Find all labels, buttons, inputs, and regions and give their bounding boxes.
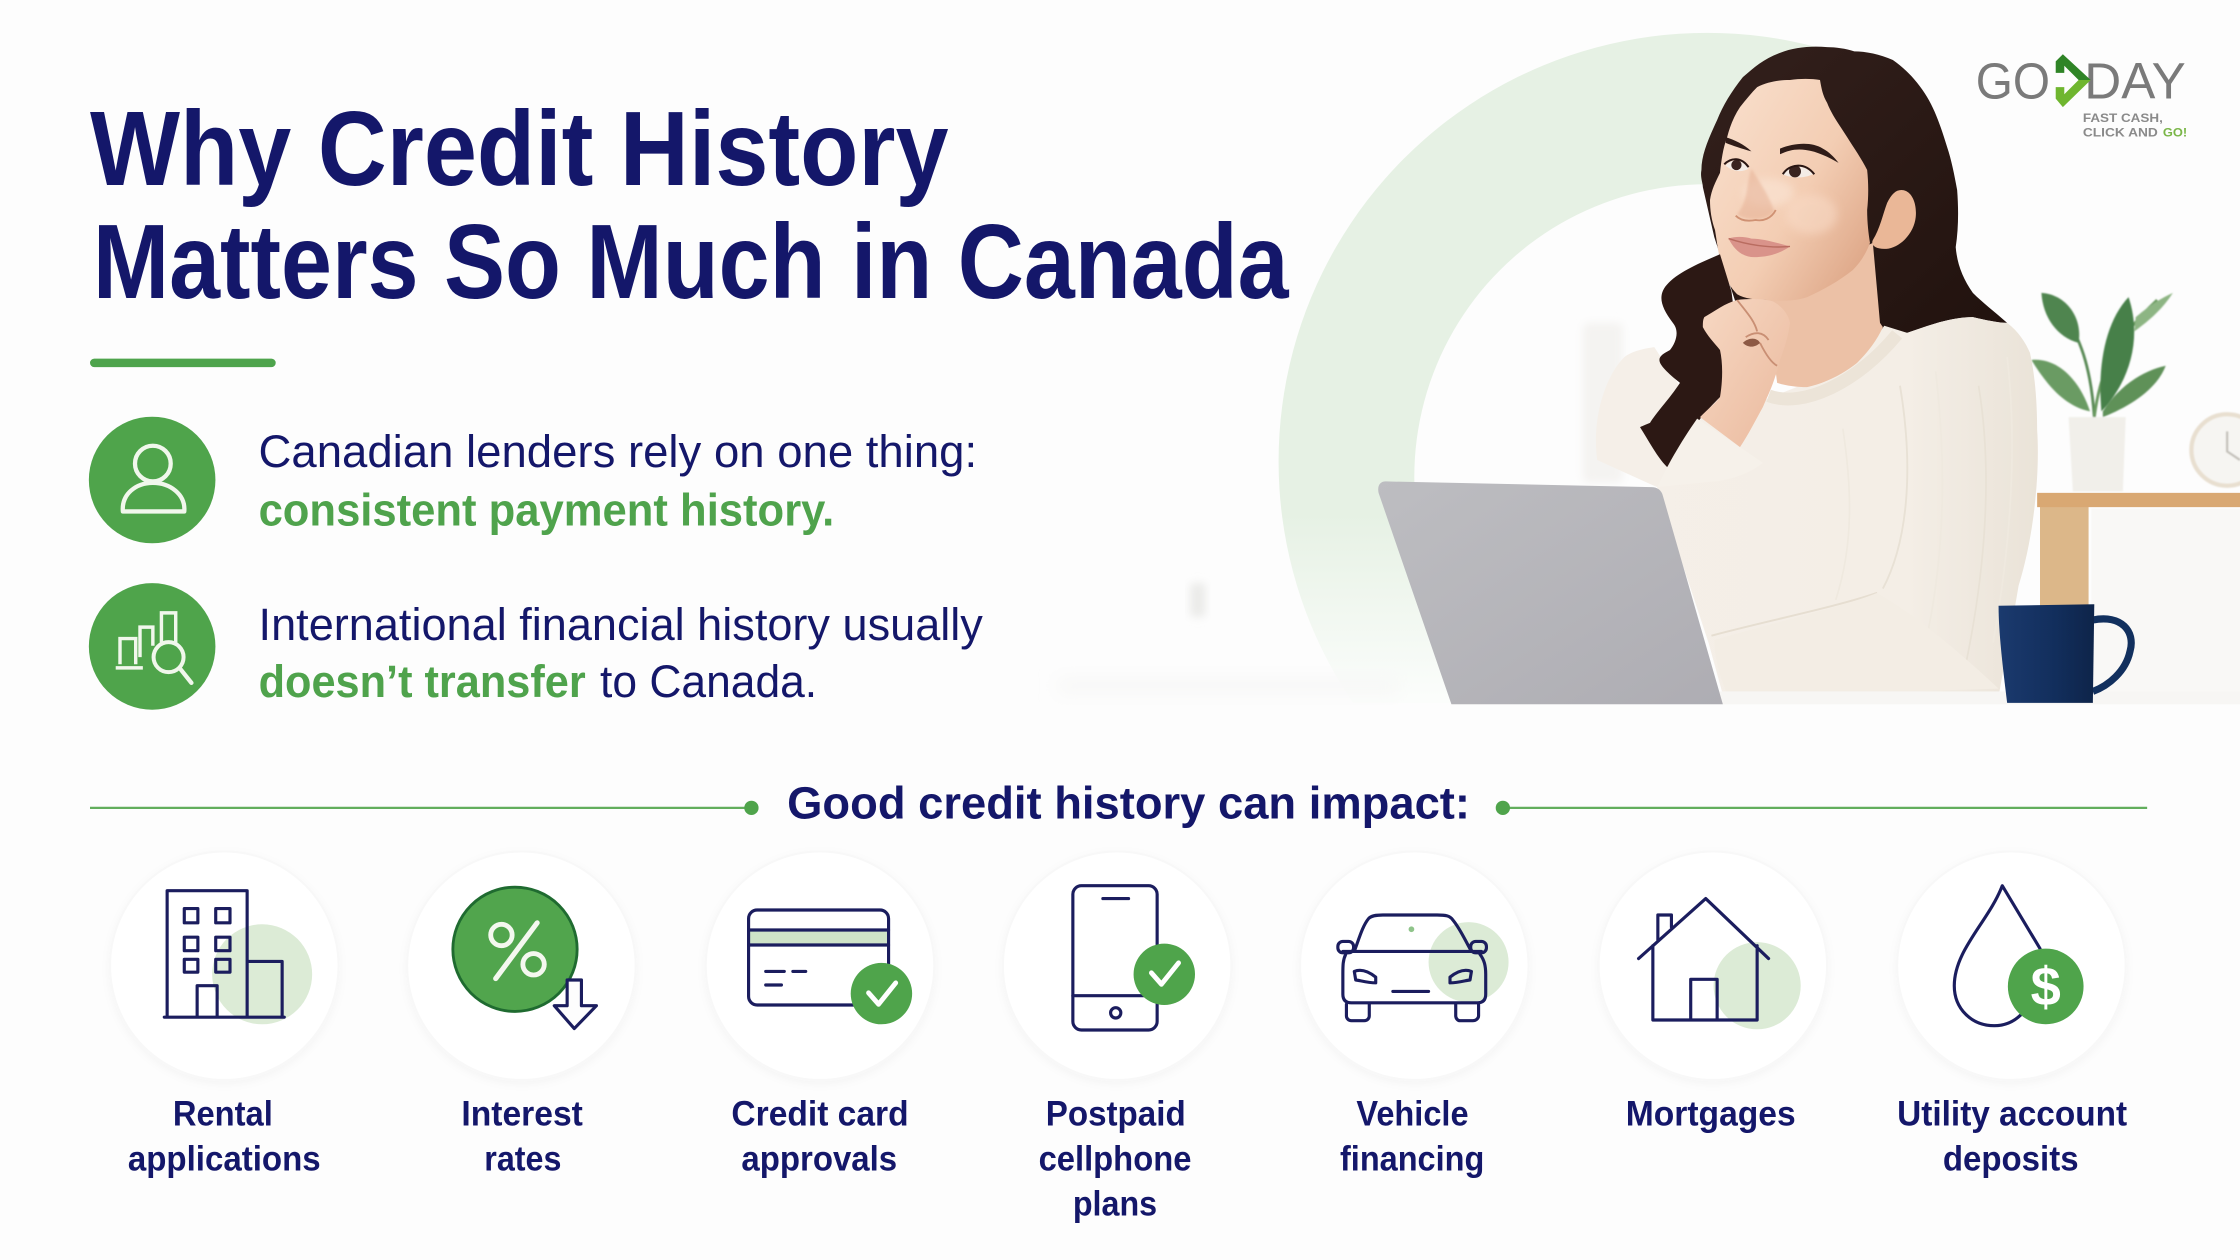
item: utility account deposits: deposits [1943,1140,2079,1179]
eyebrows [1726,137,1839,163]
item: postpaid cellphone plans: plans [1073,1185,1157,1224]
icon: water drop with dollar: $ [2031,957,2061,1018]
ear [1872,190,1916,249]
title [90,90,1290,321]
sweater [1596,317,2038,700]
logo: GoDay: DAY [2084,53,2186,110]
icon: chart with magnifier [89,583,215,710]
table [1451,691,2240,704]
point 2: international history: International financial history usually [259,599,983,650]
icon: person [89,417,215,543]
icon: apartment building [164,891,312,1024]
title: Matters So Much in Canada [93,203,1290,321]
hair back [1701,47,2007,334]
item: utility account deposits: Utility account [1897,1095,2127,1134]
face [1710,79,1870,301]
section heading with rules [90,778,2147,829]
icon: green arrow [2056,54,2091,107]
item: interest rates: Interest [461,1095,583,1134]
item: vehicle financing: financing [1340,1140,1484,1179]
icon: car [1338,915,1509,1021]
icon: percent coin with down arrow [453,887,596,1029]
icon: house [1639,899,1801,1029]
blurred room objects [1057,323,1623,694]
title: Why Credit History [90,90,949,208]
wall clock [2191,414,2240,486]
potted plant [2031,293,2173,491]
item: interest rates [407,851,636,1179]
coffee mug [1999,604,2131,703]
item: vehicle financing [1300,851,1529,1179]
point 1: consistent payment history: consistent payment history. [259,485,834,536]
sleeve cuff [1657,419,1763,487]
item: rental applications: Rental [173,1095,273,1134]
logo: GoDay: GO! [2163,125,2187,139]
item: rental applications [110,851,339,1179]
laptop [1378,481,1723,704]
item: rental applications: applications [128,1140,321,1179]
icon: credit card with check [749,910,912,1024]
icon: water drop with dollar [1954,886,2084,1026]
eyes [1726,161,1813,178]
item: postpaid cellphone plans: Postpaid [1046,1095,1186,1134]
hand [1700,299,1790,447]
hero photo: woman at laptop [1057,33,2240,890]
item: vehicle financing: Vehicle [1356,1095,1469,1134]
item: postpaid cellphone plans: cellphone [1039,1140,1191,1179]
point 1: consistent payment history: Canadian lenders rely on one thing: [259,426,977,477]
section heading with rules: Good credit history can impact: [787,778,1470,829]
item: utility account deposits [1897,851,2127,1179]
logo: GoDay: FAST CASH, [2083,111,2163,125]
background arc [1278,33,1814,650]
item: credit card approvals [706,851,934,1179]
logo: GoDay: GO [1976,53,2050,110]
point 1: consistent payment history [89,417,977,543]
lips [1729,237,1790,257]
nose [1736,210,1776,221]
point 2: international history: to Canada. [600,656,817,707]
item: mortgages: Mortgages [1626,1095,1796,1134]
logo: GoDay [1976,53,2187,139]
title underline [90,359,276,367]
item: credit card approvals: Credit card [731,1095,909,1134]
point 2: international history: doesn’t transfer [259,656,586,707]
point 2: international history [89,583,983,710]
logo: GoDay: CLICK AND [2083,125,2158,139]
shelf and cabinet [2037,493,2240,700]
item: credit card approvals: approvals [741,1140,897,1179]
icon: phone with check [1073,886,1195,1030]
item: interest rates: rates [484,1140,561,1179]
item: postpaid cellphone plans [1003,851,1231,1224]
hair lock over sweater [1640,254,1734,467]
neck [1766,243,1883,387]
item: mortgages [1599,851,1827,1134]
